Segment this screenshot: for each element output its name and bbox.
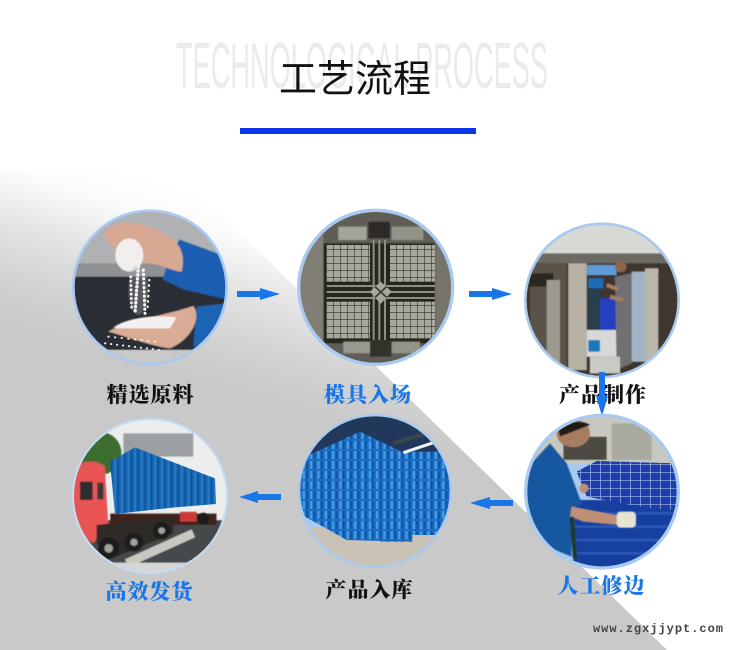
step 1: raw materials: [70, 209, 230, 407]
arrow: step 4 to 5: [470, 497, 513, 509]
arrow: step 3 to 4: [596, 372, 608, 416]
step 2: mold: [297, 209, 457, 407]
step 6: delivery: [72, 418, 228, 604]
label: 产品入库: [326, 578, 414, 602]
step 5: warehouse: [298, 413, 455, 602]
label: 人工修边: [558, 574, 646, 598]
background: grey gradient triangle: [0, 170, 667, 650]
photo: worker at machine: [523, 222, 683, 380]
label: 精选原料: [106, 383, 194, 407]
title underline: [240, 128, 476, 134]
title: 工艺流程: [279, 59, 431, 101]
label: 高效发货: [106, 580, 195, 604]
photo: pallet mold: [297, 209, 457, 367]
step 4: manual trimming: [524, 414, 680, 598]
step 3: production: [523, 222, 683, 407]
arrow: step 5 to 6: [239, 491, 281, 503]
photo: worker trimming pallet: [524, 414, 680, 570]
photo: stacked blue pallets: [298, 413, 455, 570]
arrow: step 2 to 3: [469, 288, 512, 300]
label: 产品制作: [559, 383, 647, 407]
photo: truck loaded with pallets: [72, 418, 228, 576]
label: 模具入场: [324, 383, 412, 407]
photo: hands pouring pellets: [70, 209, 230, 370]
website url: www.zgxjjypt.com: [593, 622, 723, 636]
arrow: step 1 to 2: [237, 288, 280, 300]
